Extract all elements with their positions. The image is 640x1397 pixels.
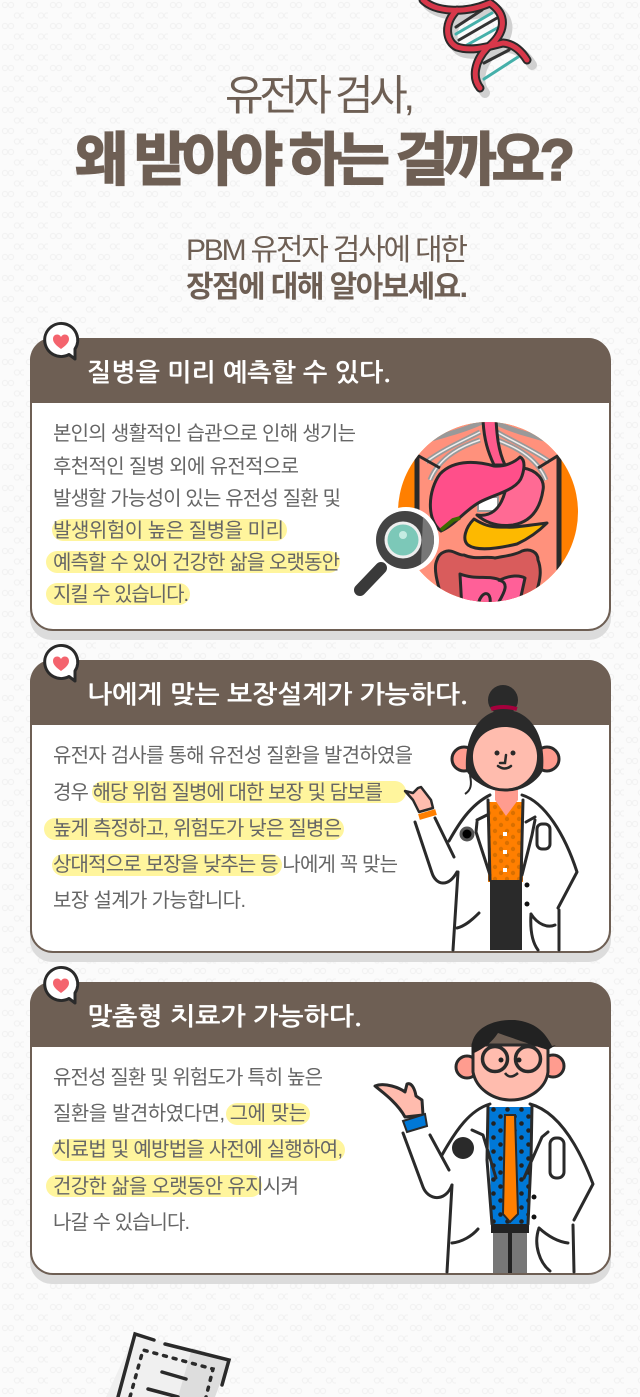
body text: 질환을 발견하였다면, 그에 맞는 [53, 1102, 307, 1125]
body text: 유전성 질환 및 위험도가 특히 높은 [53, 1066, 323, 1089]
title [75, 72, 575, 193]
title: 왜 받아야 하는 걸까요? [75, 128, 575, 193]
body text: 상대적으로 보장을 낮추는 등 나에게 꼭 맞는 [53, 853, 398, 876]
illustration: female doctor [405, 685, 577, 950]
body text: 후천적인 질병 외에 유전적으로 [53, 455, 299, 478]
icon: DNA helix [423, 0, 532, 93]
body text: 유전자 검사를 통해 유전성 질환을 발견하였을 [53, 744, 413, 767]
icon: heart bubble [45, 323, 78, 359]
highlights [44, 781, 406, 876]
body text: 예측할 수 있어 건강한 삶을 오랫동안 [53, 551, 340, 574]
heading: 나에게 맞는 보장설계가 가능하다. [87, 681, 468, 707]
subtitle: PBM 유전자 검사에 대한 [186, 234, 468, 267]
body text: 본인의 생활적인 습관으로 인해 생기는 [53, 422, 356, 445]
subtitle: 장점에 대해 알아보세요. [186, 271, 468, 304]
body text: 발생위험이 높은 질병을 미리 [53, 519, 284, 542]
icon: document at bottom [106, 1334, 229, 1397]
body text: 경우 해당 위험 질병에 대한 보장 및 담보를 [53, 781, 383, 804]
body text: 보장 설계가 가능합니다. [53, 889, 246, 912]
illustration: male doctor [375, 1020, 593, 1273]
highlights [46, 1103, 345, 1197]
panel: tailored treatment [30, 967, 611, 1284]
icon: heart bubble [45, 967, 78, 1003]
heading: 맞춤형 치료가 가능하다. [87, 1003, 362, 1029]
highlights [46, 519, 340, 605]
icon: heart bubble [45, 645, 78, 681]
body text [53, 422, 356, 606]
body text [53, 744, 413, 912]
body text: 지킬 수 있습니다. [53, 583, 189, 606]
subtitle [186, 234, 468, 304]
heading: 질병을 미리 예측할 수 있다. [87, 359, 391, 385]
body text: 치료법 및 예방법을 사전에 실행하여, [53, 1138, 343, 1161]
body text: 높게 측정하고, 위험도가 낮은 질병은 [53, 817, 342, 840]
icon: organs in circle with magnifier [360, 420, 578, 610]
body text: 건강한 삶을 오랫동안 유지시켜 [53, 1175, 299, 1198]
panel: predict disease [30, 323, 611, 640]
body text [53, 1066, 343, 1234]
panel: custom coverage [30, 645, 611, 962]
title: 유전자 검사, [225, 72, 415, 119]
body text: 발생할 가능성이 있는 유전성 질환 및 [53, 487, 341, 510]
body text: 나갈 수 있습니다. [53, 1211, 190, 1234]
